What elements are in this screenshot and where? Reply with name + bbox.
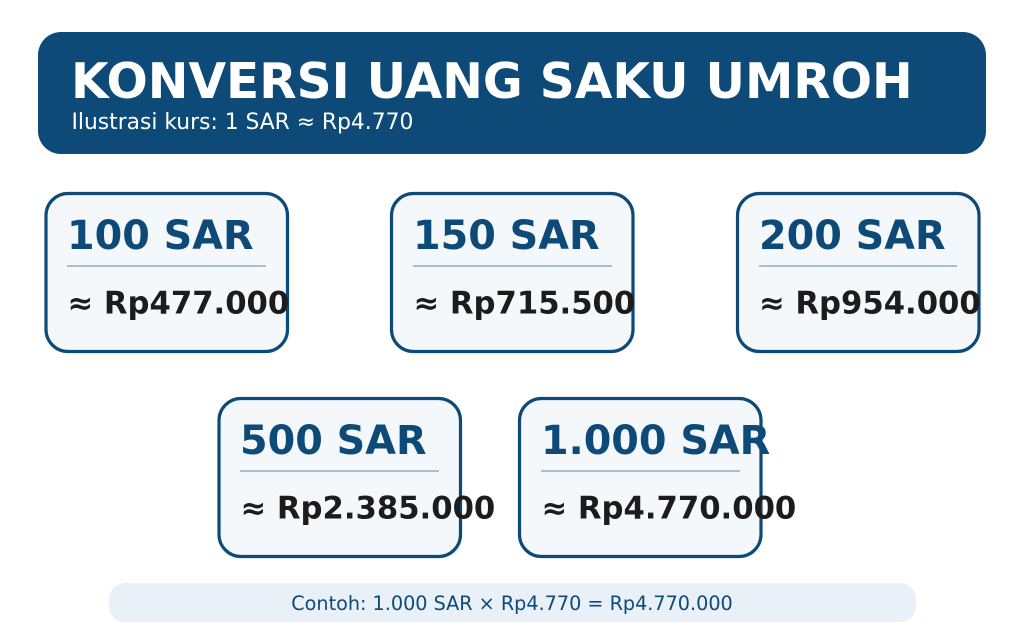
card: 200 SAR: ≈ Rp954.000 [759,286,981,322]
footer example note: Contoh: 1.000 SAR × Rp4.770 = Rp4.770.000 [291,592,733,615]
card: 150 SAR [392,194,635,352]
card: 500 SAR: ≈ Rp2.385.000 [240,492,495,526]
card: 1.000 SAR: ≈ Rp4.770.000 [542,492,796,526]
footer example note [109,583,916,622]
card: 100 SAR: ≈ Rp477.000 [68,286,289,322]
card: 1.000 SAR: 1.000 SAR [541,418,770,464]
title: KONVERSI UANG SAKU UMROH [71,54,913,110]
card: 150 SAR: ≈ Rp715.500 [414,286,635,322]
card: 1.000 SAR [520,398,796,556]
header banner [38,32,986,154]
card: 500 SAR [219,398,495,556]
card: 500 SAR: 500 SAR [240,418,427,464]
card: 100 SAR [46,194,289,352]
card: 200 SAR: 200 SAR [759,213,946,259]
subtitle: Ilustrasi kurs: 1 SAR ≈ Rp4.770 [72,110,413,135]
card: 100 SAR: 100 SAR [67,213,254,259]
card: 150 SAR: 150 SAR [413,213,600,259]
card: 200 SAR [738,194,981,352]
